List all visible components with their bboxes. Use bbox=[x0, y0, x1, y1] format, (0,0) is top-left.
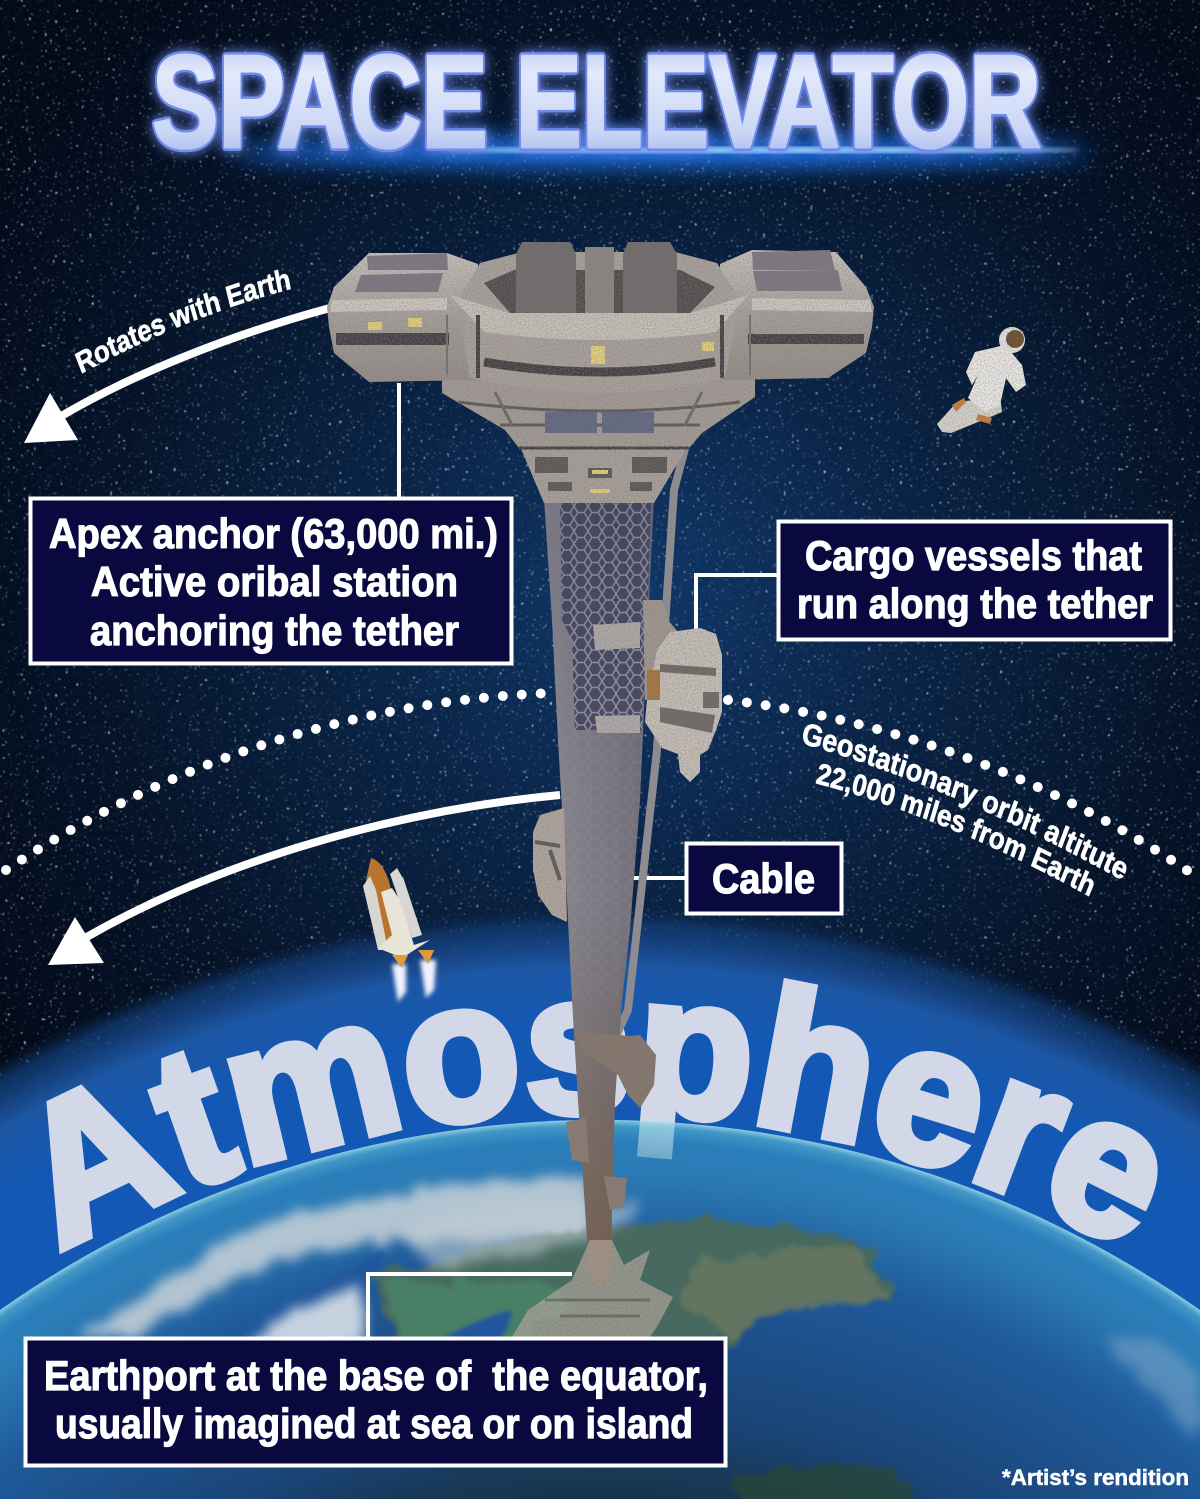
shuttle tank bbox=[366, 858, 402, 945]
shuttle flames bbox=[392, 950, 434, 968]
upper cargo vessel bbox=[593, 600, 722, 782]
brown land right bbox=[680, 1245, 890, 1340]
blue panels bbox=[545, 412, 654, 433]
ring bbox=[458, 252, 740, 393]
label: geostationary orbit altitude: 22,000 miles from Earth bbox=[816, 764, 1094, 896]
space elevator bbox=[327, 242, 874, 1337]
collar panels bbox=[535, 457, 667, 491]
callout: earthport bbox=[26, 1338, 726, 1466]
cloud band bbox=[77, 1178, 590, 1340]
label: rotates with Earth: Rotates with Earth bbox=[74, 270, 291, 374]
tether thin cable bbox=[612, 445, 686, 1045]
ocean wedge bbox=[362, 1250, 384, 1267]
small cargo vessel bbox=[566, 1118, 589, 1163]
right limb clouds bbox=[1100, 1337, 1200, 1440]
large curved label: Atmosphere: Atmosphere bbox=[46, 978, 1158, 1254]
footnote: artist's rendition: *Artist’s rendition bbox=[1002, 1465, 1189, 1490]
callout: earthport: Earthport at the base of the equator, bbox=[44, 1352, 708, 1399]
island landmass bbox=[375, 1219, 893, 1345]
lower cargo vessel bbox=[575, 1032, 656, 1108]
title flare bbox=[230, 139, 1090, 165]
callout: cable bbox=[686, 844, 842, 914]
right tower bbox=[623, 242, 677, 313]
clouds over northern land bbox=[400, 1200, 640, 1270]
planet Earth bbox=[0, 1120, 1200, 1499]
dotted arc: geostationary orbit left bbox=[6, 693, 552, 870]
callout: cargo vessels: Cargo vessels that bbox=[805, 532, 1142, 579]
callout: cargo vessels: run along the tether bbox=[797, 580, 1153, 627]
callout: apex anchor: anchoring the tether bbox=[90, 607, 459, 654]
bright land lower left bbox=[382, 1276, 558, 1336]
clouds left of island bbox=[250, 1285, 365, 1350]
left tower bbox=[516, 242, 576, 313]
icon: space shuttle bbox=[363, 858, 436, 1002]
vessel near base bbox=[604, 1176, 627, 1210]
label: geostationary orbit altitude: Geostationary orbit altitute bbox=[803, 724, 1126, 878]
left pod bbox=[327, 253, 478, 382]
lower land bbox=[730, 1464, 910, 1499]
lower hex texture bbox=[552, 620, 648, 1000]
front rim bbox=[450, 295, 748, 340]
dark bands bbox=[336, 315, 864, 448]
inlet bbox=[444, 1308, 514, 1336]
right pod bbox=[720, 250, 874, 380]
earthport base bbox=[512, 1240, 673, 1337]
callout: cargo vessels bbox=[778, 522, 1170, 640]
title bbox=[152, 28, 1090, 175]
solar panels bbox=[355, 250, 842, 292]
callout: cable: Cable bbox=[712, 855, 815, 902]
callout: apex anchor: Active oribal station bbox=[91, 558, 458, 605]
tether tube bbox=[544, 498, 654, 1285]
callout: apex anchor bbox=[30, 498, 512, 664]
atmosphere glow bbox=[0, 905, 1200, 1499]
arrow: rotates with Earth lower bbox=[48, 795, 560, 965]
middle cargo vessel bbox=[533, 808, 567, 922]
shuttle orbiter bbox=[378, 888, 430, 958]
center column bbox=[585, 247, 614, 313]
pod top highlight bbox=[330, 298, 872, 312]
callout: earthport: usually imagined at sea or on island bbox=[55, 1400, 693, 1447]
lower hull bbox=[442, 372, 755, 448]
shuttle exhaust bbox=[392, 960, 436, 1002]
arrow: rotates with Earth upper bbox=[24, 308, 330, 443]
hex sleeve bbox=[560, 500, 651, 730]
lower collar bbox=[519, 444, 689, 503]
shuttle boosters bbox=[363, 868, 422, 950]
apex anchor station bbox=[327, 242, 874, 503]
icon: astronaut bbox=[937, 327, 1026, 433]
inner opening bbox=[484, 270, 715, 313]
leader lines bbox=[368, 383, 777, 1337]
callout: apex anchor: Apex anchor (63,000 mi.) bbox=[49, 510, 498, 557]
dotted arc: geostationary orbit right bbox=[728, 700, 1194, 875]
lit windows bbox=[368, 318, 714, 493]
